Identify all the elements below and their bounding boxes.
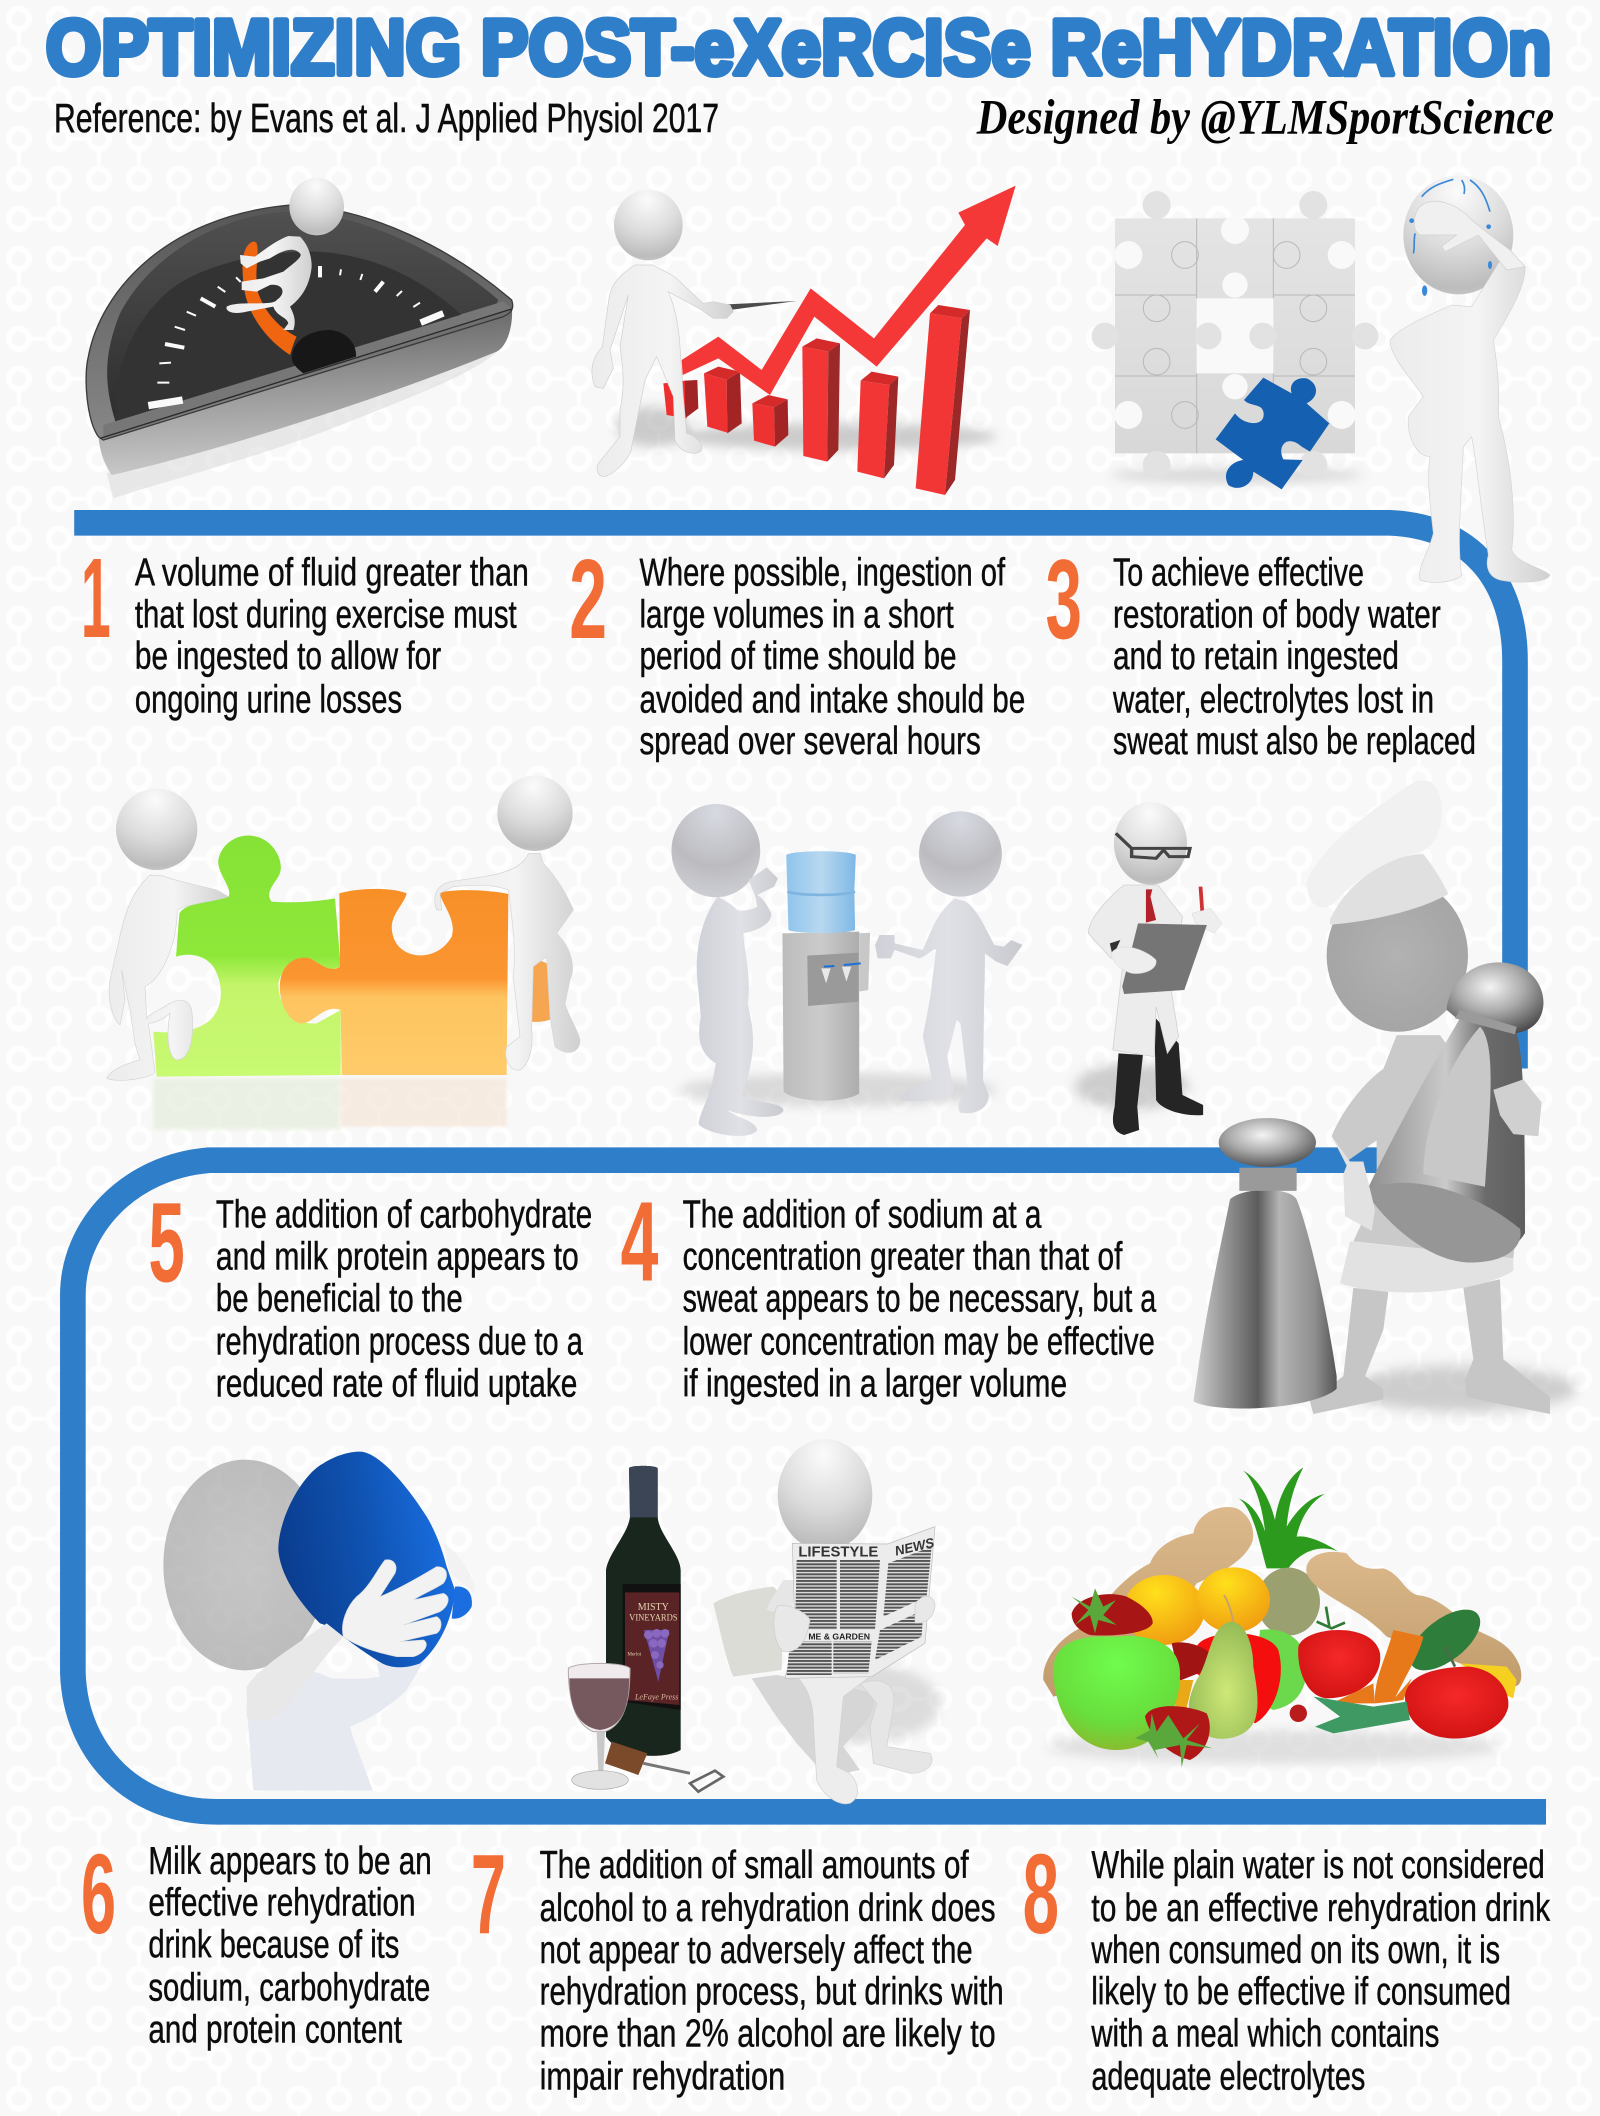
wine label: VINEYARDS bbox=[629, 1614, 677, 1624]
text block 1: A volume of fluid greater than bbox=[135, 551, 529, 594]
blue cup bbox=[278, 1452, 455, 1667]
text block 8: adequate electrolytes bbox=[1091, 2056, 1365, 2099]
flowing blue path bbox=[73, 523, 1546, 1812]
step 1 bbox=[81, 535, 529, 721]
green and red peppers bbox=[1253, 1629, 1307, 1710]
reference line: Reference: by Evans et al. J Applied Physiol 2017 bbox=[54, 95, 719, 141]
number 8: 8 bbox=[1023, 1831, 1059, 1958]
bar chart bbox=[663, 305, 970, 495]
text block 5: be beneficial to the bbox=[216, 1277, 463, 1320]
text block 5: The addition of carbohydrate bbox=[216, 1194, 592, 1237]
pineapple bbox=[1257, 1568, 1320, 1636]
text block 7: alcohol to a rehydration drink does bbox=[540, 1887, 996, 1930]
pineapple leaves bbox=[1238, 1467, 1338, 1568]
arrow: rising trend bbox=[682, 186, 1016, 395]
text block 7: The addition of small amounts of bbox=[540, 1844, 969, 1887]
illustration: figure drinking from blue cup bbox=[163, 1452, 475, 1791]
strawberries bbox=[1072, 1594, 1153, 1636]
number 2: 2 bbox=[569, 536, 607, 663]
text block 5: rehydration process due to a bbox=[216, 1320, 583, 1363]
text block 2 bbox=[639, 551, 1025, 763]
illustration: figure reading newspaper on toilet bbox=[713, 1439, 940, 1804]
wine label: MISTY bbox=[638, 1602, 669, 1613]
text block 7: impair rehydration bbox=[540, 2056, 785, 2099]
illustration: jigsaw with missing piece bbox=[1092, 191, 1378, 489]
text block 5 bbox=[216, 1194, 592, 1405]
newspaper bbox=[785, 1527, 936, 1678]
illustration: scientist with clipboard bbox=[1075, 802, 1222, 1135]
yellow fruits bbox=[1123, 1575, 1205, 1645]
illustration: speedometer with figure bbox=[86, 178, 513, 498]
corn bbox=[1460, 1663, 1517, 1698]
water cooler bbox=[782, 851, 870, 1101]
text block 6 bbox=[148, 1840, 432, 2051]
illustration: fruit and vegetables bbox=[1043, 1467, 1521, 1767]
text block 4: concentration greater than that of bbox=[683, 1235, 1123, 1278]
text block 7: not appear to adversely affect the bbox=[540, 1929, 973, 1972]
cucumber bbox=[1399, 1598, 1491, 1682]
text block 2: Where possible, ingestion of bbox=[639, 551, 1005, 594]
wine label: LeFaye Press bbox=[634, 1692, 678, 1701]
text block 7: more than 2% alcohol are likely to bbox=[540, 2013, 996, 2056]
text block 3: sweat must also be replaced bbox=[1113, 720, 1476, 763]
text block 6: and protein content bbox=[148, 2008, 402, 2051]
step 6 bbox=[81, 1831, 432, 2051]
text block 4 bbox=[683, 1194, 1156, 1405]
text block 4: lower concentration may be effective bbox=[683, 1320, 1155, 1363]
text block 5: and milk protein appears to bbox=[216, 1235, 579, 1278]
text block 6: drink because of its bbox=[148, 1923, 399, 1966]
peanut right bbox=[1306, 1552, 1521, 1687]
number 5: 5 bbox=[148, 1180, 185, 1307]
text block 6: effective rehydration bbox=[148, 1882, 416, 1925]
text block 2: spread over several hours bbox=[639, 720, 981, 763]
illustration: salt shakers with chef bbox=[1193, 780, 1577, 1414]
text block 8 bbox=[1091, 1844, 1550, 2099]
text block 2: avoided and intake should be bbox=[639, 678, 1025, 721]
illustration: figure presenting rising chart bbox=[592, 186, 1016, 495]
text block 1: ongoing urine losses bbox=[135, 678, 402, 721]
text block 2: period of time should be bbox=[639, 635, 956, 678]
cork and corkscrew bbox=[605, 1742, 723, 1792]
text block 1 bbox=[135, 551, 529, 721]
step 1: 1 bbox=[81, 535, 111, 662]
step 4 bbox=[621, 1178, 1156, 1405]
text block 2: large volumes in a short bbox=[639, 593, 954, 636]
text block 1: be ingested to allow for bbox=[135, 635, 441, 678]
asparagus bbox=[1313, 1697, 1410, 1733]
step 8 bbox=[1023, 1831, 1550, 2099]
carrots bbox=[1375, 1630, 1423, 1703]
number 6: 6 bbox=[81, 1831, 116, 1958]
text block 7: rehydration process, but drinks with bbox=[540, 1971, 1004, 2014]
small salt shaker bbox=[1193, 1118, 1337, 1408]
step 2 bbox=[569, 536, 1025, 763]
text block 3: water, electrolytes lost in bbox=[1112, 678, 1434, 721]
wine label bbox=[623, 1584, 681, 1710]
text block 6: Milk appears to be an bbox=[148, 1840, 432, 1883]
text block 3 bbox=[1112, 551, 1476, 763]
text block 3: restoration of body water bbox=[1113, 593, 1441, 636]
step 5 bbox=[148, 1180, 592, 1405]
illustration: sweating figure bbox=[1390, 176, 1550, 582]
text block 7 bbox=[540, 1844, 1004, 2099]
icon: orange puzzle piece bbox=[280, 889, 508, 1075]
icon: green puzzle piece bbox=[153, 836, 341, 1077]
text block 1: that lost during exercise must bbox=[135, 593, 517, 636]
step 3 bbox=[1046, 536, 1476, 763]
illustration: two figures at water cooler bbox=[671, 804, 1023, 1136]
pear bbox=[1189, 1622, 1258, 1739]
wine label: Merlot bbox=[628, 1653, 642, 1658]
text block 3: and to retain ingested bbox=[1113, 635, 1399, 678]
number 7: 7 bbox=[471, 1831, 506, 1958]
text block 4: The addition of sodium at a bbox=[683, 1194, 1042, 1237]
number 3: 3 bbox=[1046, 536, 1082, 663]
text block 8: with a meal which contains bbox=[1091, 2013, 1439, 2056]
number 4: 4 bbox=[621, 1178, 658, 1305]
newspaper: ME & GARDEN bbox=[808, 1631, 870, 1641]
text block 6: sodium, carbohydrate bbox=[148, 1967, 430, 2010]
text block 4: if ingested in a larger volume bbox=[683, 1362, 1067, 1405]
illustration: wine bottle and glass bbox=[568, 1466, 723, 1792]
peanut left bbox=[1043, 1507, 1253, 1697]
green apple bbox=[1053, 1636, 1180, 1750]
text block 4: sweat appears to be necessary, but a bbox=[683, 1277, 1156, 1320]
text block 5: reduced rate of fluid uptake bbox=[216, 1362, 577, 1405]
wine glass bbox=[568, 1663, 630, 1789]
step 7 bbox=[471, 1831, 1004, 2099]
tomato front bbox=[1405, 1667, 1508, 1738]
big salt shaker bbox=[1365, 962, 1543, 1262]
tomato back bbox=[1298, 1630, 1380, 1698]
newspaper: NEWS bbox=[893, 1535, 936, 1559]
text block 3: To achieve effective bbox=[1113, 551, 1364, 594]
icon: blue puzzle piece bbox=[1216, 378, 1329, 489]
glasses bbox=[1116, 833, 1190, 858]
illustration: figures joining puzzle pieces bbox=[107, 776, 580, 1130]
newspaper: LIFESTYLE bbox=[798, 1545, 879, 1561]
